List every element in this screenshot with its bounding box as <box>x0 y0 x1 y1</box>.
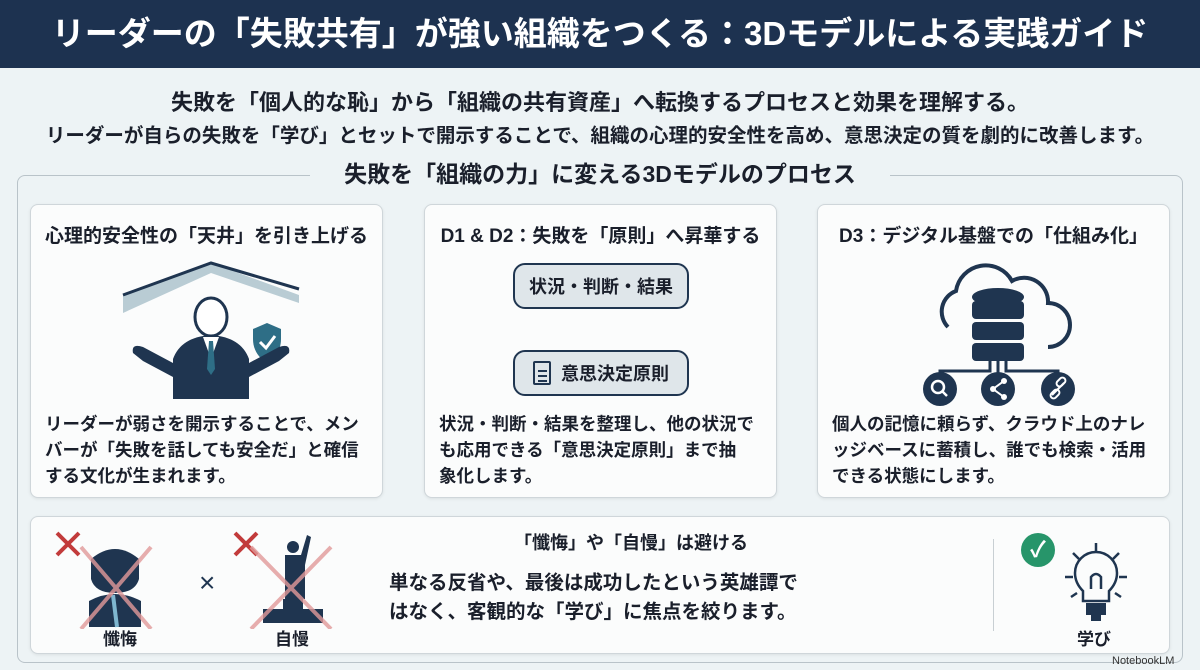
label: learning: 学び <box>1077 630 1111 649</box>
pill: decision principle <box>513 350 689 396</box>
section frame <box>17 175 1183 663</box>
icon: lightbulb <box>1065 543 1127 621</box>
icon: boasting crossed <box>234 532 332 629</box>
label: boasting: 自慢 <box>275 630 309 649</box>
pill: situation: 状況・判断・結果 <box>529 277 673 297</box>
heading: D3：デジタル基盤での「仕組み化」 <box>839 226 1148 247</box>
panel: avoid confession and boasting <box>30 516 1170 654</box>
panel: psychological safety <box>30 204 383 498</box>
body text: リーダーが弱さを開示することで、メンバーが「失敗を話しても安全だ」と確信する文化が生まれます。 <box>45 414 359 486</box>
watermark: NotebookLM <box>1112 655 1174 667</box>
title bar: リーダーの「失敗共有」が強い組織をつくる：3Dモデルによる実践ガイド <box>52 15 1148 52</box>
divider <box>993 539 994 631</box>
body text: はなく、客観的な「学び」に焦点を絞ります。 <box>389 601 797 623</box>
body text <box>389 572 798 623</box>
title bar <box>0 0 1200 68</box>
body text: 個人の記憶に頼らず、クラウド上のナレッジベースに蓄積し、誰でも検索・活用できる状態にします。 <box>832 414 1146 486</box>
lead text: リーダーが自らの失敗を「学び」とセットで開示することで、組織の心理的安全性を高め、意思決定の質を劇的に改善します。 <box>46 125 1154 147</box>
icon: check: ✓ <box>1030 537 1046 562</box>
icon: confession crossed <box>56 532 152 629</box>
icon: leader under roof <box>122 261 300 399</box>
subtitle: 失敗を「個人的な恥」から「組織の共有資産」へ転換するプロセスと効果を理解する。 <box>171 90 1029 115</box>
body text: も応用できる「意思決定原則」まで抽 <box>439 440 736 460</box>
panel: D1 & D2 <box>424 204 777 498</box>
pill: situation <box>513 263 689 309</box>
body text: 状況・判断・結果を整理し、他の状況で <box>439 414 754 434</box>
body text: 象化します。 <box>439 466 542 486</box>
icon: cloud database <box>923 263 1075 406</box>
icon: times: × <box>199 567 215 598</box>
heading: D1 & D2：失敗を「原則」へ昇華する <box>441 226 760 247</box>
panel: D3 <box>817 204 1170 498</box>
pill: decision principle: 意思決定原則 <box>561 364 669 384</box>
section heading: 失敗を「組織の力」に変える3Dモデルのプロセス <box>344 161 856 187</box>
heading: 「懺悔」や「自慢」は避ける <box>514 533 748 553</box>
icon: check <box>1021 533 1055 567</box>
body text: 単なる反省や、最後は成功したという英雄譚で <box>389 572 798 594</box>
label: confession: 懺悔 <box>103 630 137 649</box>
body text <box>439 414 754 486</box>
heading: 心理的安全性の「天井」を引き上げる <box>45 226 368 247</box>
